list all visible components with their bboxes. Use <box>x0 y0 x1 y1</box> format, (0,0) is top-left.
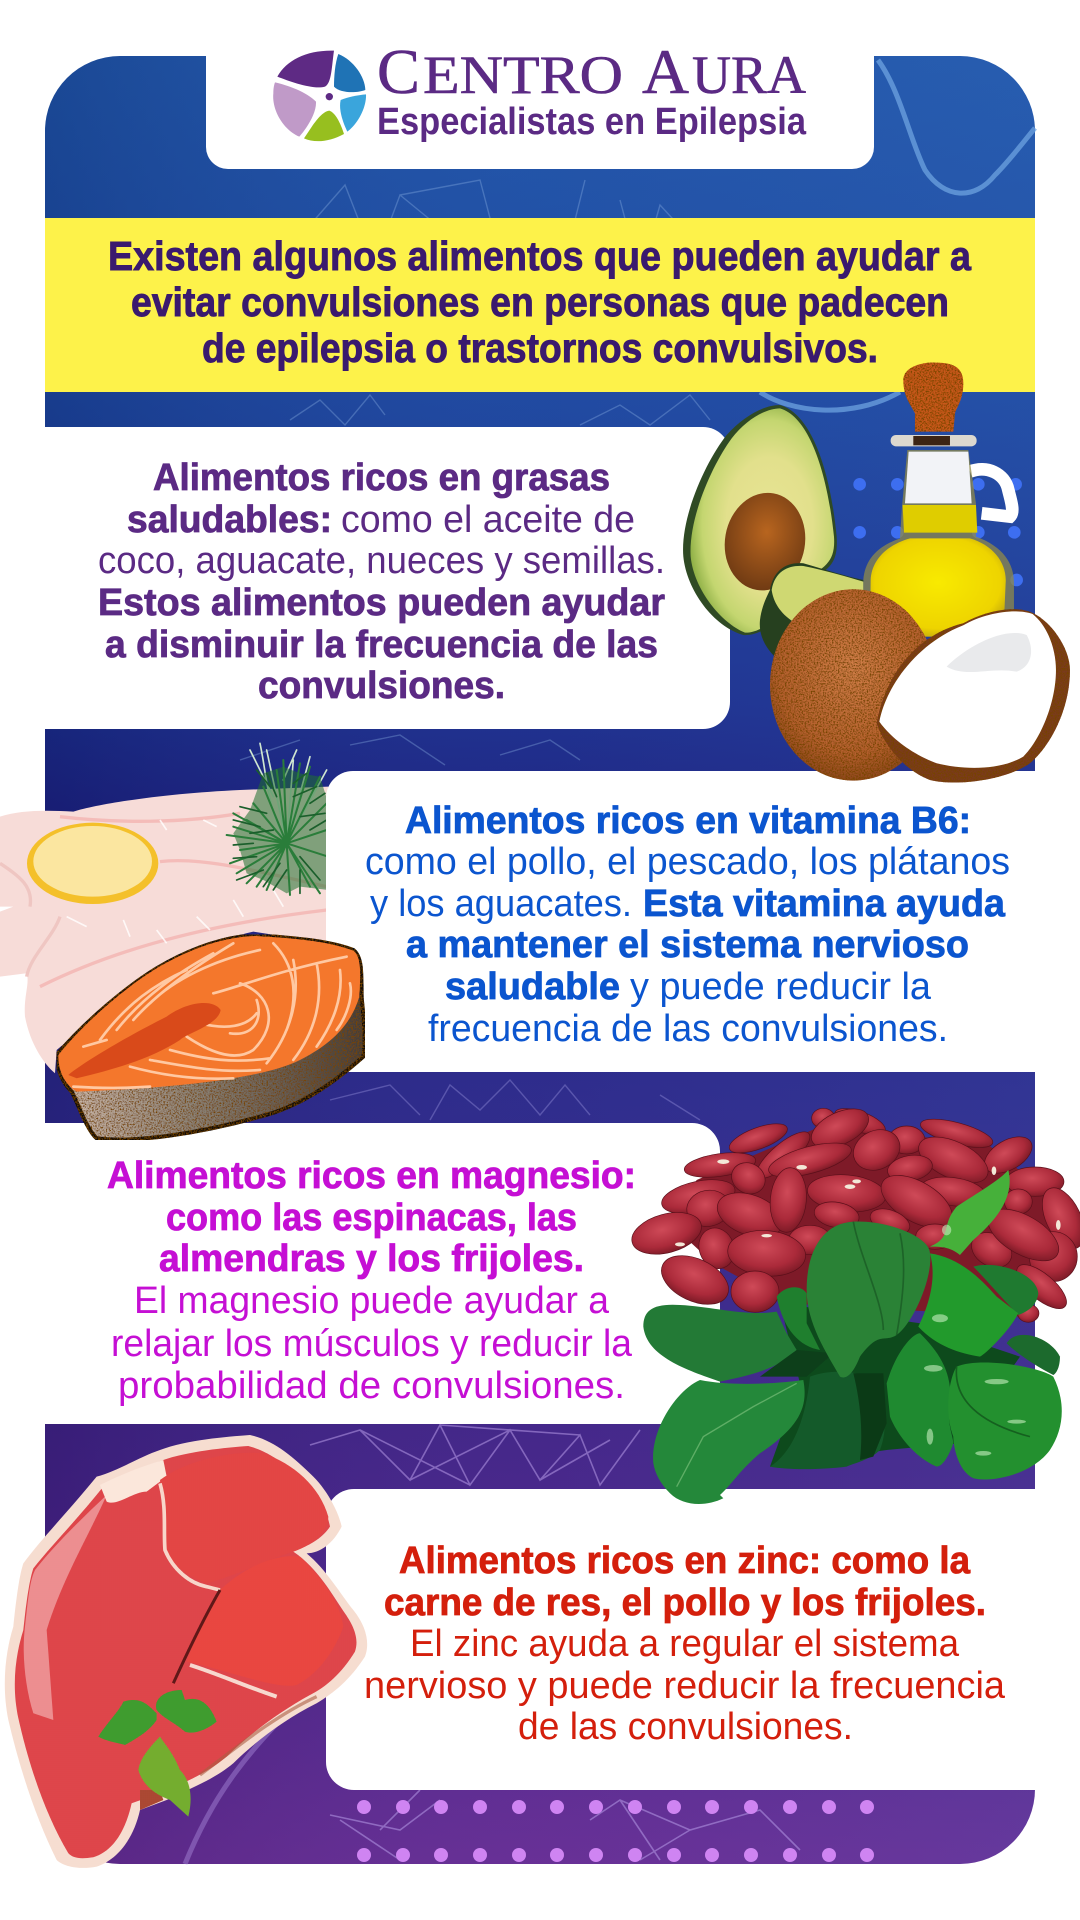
banner text: evitar convulsiones en personas que padecen <box>131 279 949 325</box>
card: healthy fats <box>0 427 730 729</box>
food: fish fillet with lemon and dill <box>0 743 328 1073</box>
text: healthy fats description: como el aceite de <box>341 499 635 541</box>
text: magnesium description: Alimentos ricos en magnesio: <box>107 1155 636 1197</box>
text: vitamin B6 description: frecuencia de las convulsiones. <box>428 1008 948 1050</box>
avocado half <box>683 405 837 635</box>
text: healthy fats description: Estos alimentos pueden ayudar <box>98 582 665 624</box>
text: healthy fats description: Alimentos ricos en grasas <box>153 457 610 499</box>
banner text <box>108 233 972 371</box>
dill sprig <box>227 743 328 895</box>
text: vitamin B6 description: saludable <box>445 966 620 1008</box>
text: magnesium description: El magnesio puede ayudar a <box>134 1280 610 1322</box>
text: zinc description: de las convulsiones. <box>518 1706 853 1748</box>
logo wordmark: A <box>642 36 689 107</box>
text: vitamin B6 description: a mantener el sistema nervioso <box>406 924 969 966</box>
coconut half <box>877 609 1070 783</box>
dots behind bottle <box>853 478 1023 586</box>
text: zinc description: El zinc ayuda a regular el sistema <box>410 1623 960 1665</box>
text: magnesium description: relajar los músculos y reducir la <box>111 1323 633 1365</box>
header: logo card <box>206 36 874 169</box>
text: healthy fats description: a disminuir la frecuencia de las <box>105 624 658 666</box>
text: magnesium description: almendras y los frijoles. <box>159 1238 584 1280</box>
text: vitamin B6 description: como el pollo, el pescado, los plátanos <box>365 841 1010 883</box>
halftone overlay <box>5 1435 367 1868</box>
text: zinc description: carne de res, el pollo y los frijoles. <box>384 1582 986 1624</box>
icon: Centro Aura logo mark <box>273 51 366 141</box>
whole coconut <box>770 589 937 781</box>
card: vitamin B6 <box>326 771 1080 1072</box>
food: beef cut with parsley <box>5 1435 367 1868</box>
text: vitamin B6 description: y los aguacates. <box>370 883 632 925</box>
avocado wedge <box>760 563 863 662</box>
logo wordmark: ENTRO <box>423 45 623 105</box>
banner: yellow intro <box>45 218 1035 392</box>
text: healthy fats description: coco, aguacate, nueces y semillas. <box>98 540 665 582</box>
text: zinc description: nervioso y puede reducir la frecuencia <box>364 1665 1006 1707</box>
text: vitamin B6 description <box>365 800 1010 1050</box>
text: healthy fats description: saludables: <box>127 499 332 541</box>
logo wordmark <box>377 36 806 107</box>
text: vitamin B6 description: Alimentos ricos en vitamina B6: <box>405 800 971 842</box>
text: vitamin B6 description: Esta vitamina ayuda <box>643 883 1006 925</box>
lemon slice <box>27 823 158 904</box>
text: healthy fats description <box>98 457 665 707</box>
olive oil bottle <box>863 363 1014 637</box>
text: zinc description <box>364 1540 1006 1748</box>
text: healthy fats description: convulsiones. <box>258 665 505 707</box>
text: zinc description: Alimentos ricos en zinc: como la <box>399 1540 971 1582</box>
food: spinach leaves <box>643 1170 1062 1504</box>
text: magnesium description <box>107 1155 636 1407</box>
logo wordmark: URA <box>692 45 806 105</box>
text: magnesium description: probabilidad de convulsiones. <box>118 1365 625 1407</box>
banner text: de epilepsia o trastornos convulsivos. <box>202 325 878 371</box>
food: avocado, oil bottle and coconut <box>683 363 1070 783</box>
food: salmon steak <box>57 935 365 1140</box>
logo tagline: Especialistas en Epilepsia <box>377 101 807 143</box>
parsley <box>98 1690 217 1817</box>
text: magnesium description: como las espinacas, las <box>166 1197 577 1239</box>
card: magnesium <box>0 1123 720 1424</box>
card: zinc <box>326 1489 1080 1790</box>
text: vitamin B6 description: y puede reducir la <box>630 966 932 1008</box>
food: kidney beans <box>627 1101 1080 1322</box>
banner text: Existen algunos alimentos que pueden ayudar a <box>108 233 972 279</box>
logo wordmark: C <box>377 36 420 107</box>
